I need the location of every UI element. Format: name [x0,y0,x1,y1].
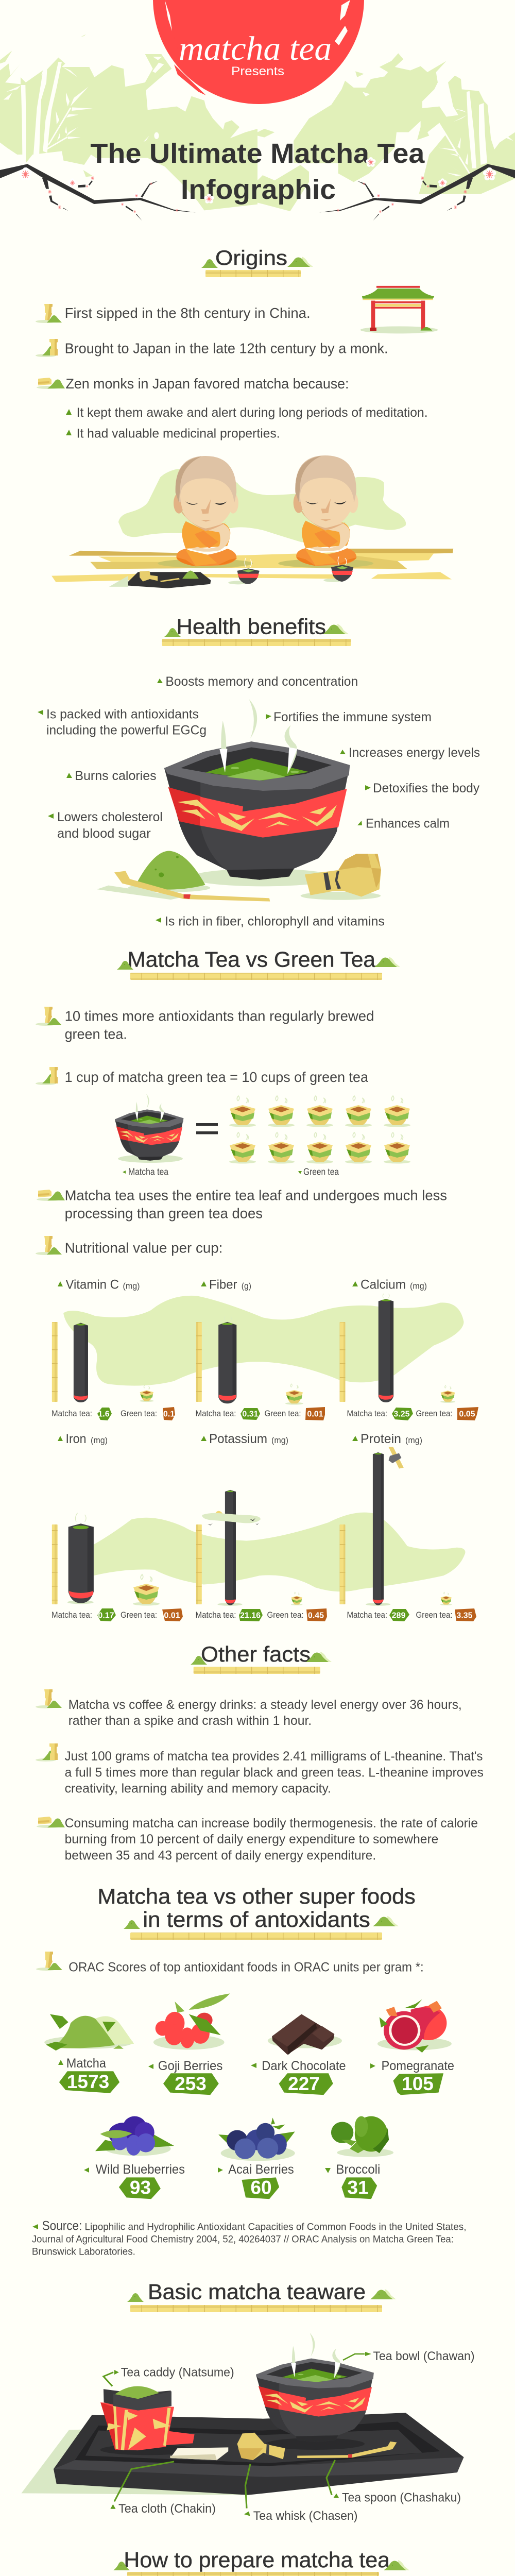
other fact 1 [36,1689,462,1728]
ORAC statement: ORAC Scores of top antioxidant foods in ORAC units per gram *: [68,1960,424,1974]
health benefits labels: Is rich in fiber, chlorophyll and vitamins [165,914,385,929]
equals sign [196,1123,218,1134]
green tea cups [133,1574,452,1605]
antioxidant foods: Pomegranate [381,2059,454,2073]
item 2: Brought to Japan in the late 12th century by a monk. [65,341,388,357]
heading: Other facts [191,1642,332,1674]
health benefits labels: Increases energy levels [349,745,480,760]
source note: Lipophilic and Hydrophilic Antioxidant Capacities of Common Foods in the United States, [84,2222,467,2233]
nutrient labels: (mg) [123,1281,140,1291]
antioxidant foods: 105 [402,2073,434,2094]
value badges [59,2071,443,2199]
antioxidant foods: 60 [250,2177,272,2198]
floor and tea things [52,549,453,588]
nutrient labels: Vitamin C [66,1278,119,1292]
nutrient labels [58,1278,140,1292]
values row 2: Matcha tea: [52,1610,92,1620]
tea cloth [170,2447,228,2460]
source note: Source: [42,2218,82,2233]
processing statement: processing than green tea does [65,1205,263,1221]
chart: nutrition row 1: Fiber [209,1278,237,1292]
antioxidant foods: 31 [347,2177,369,2198]
fiber bars [218,1316,236,1403]
item 3: Zen monks in Japan favored matcha because: [66,376,349,392]
heading: Other facts: Other facts [201,1642,311,1666]
monk 1 [174,456,238,566]
heading: Origins [201,247,313,277]
monks [174,455,358,566]
vitamin c bars [74,1317,88,1402]
nutrient labels: Iron [66,1432,87,1446]
other fact 3: burning from 10 percent of daily energy expenditure to somewhere [65,1832,438,1846]
tea tray [109,570,211,588]
label: green tea: Green tea [303,1167,339,1177]
title: The Ultimate Matcha Tea [90,138,425,169]
icon: goji berries [153,1993,230,2049]
illustration: matcha bowl with whisk, spoon and powder [97,851,381,902]
antioxidant statement: 10 times more antioxidants than regularly brewed [65,1008,374,1024]
nutrient labels: (mg) [91,1435,108,1445]
icon: clouds, sun and birds [202,1511,261,1526]
other fact 3: between 35 and 43 percent of daily energy expenditure. [65,1848,376,1862]
other fact 2: Just 100 grams of matcha tea provides 2.41 milligrams of L-theanine. That's [65,1749,483,1764]
heading: Matcha tea vs other super foods: in terms of antoxidants [143,1907,370,1931]
values row 1: 0.31 [242,1410,259,1419]
teaware labels: Tea spoon (Chashaku) [342,2490,461,2504]
values row 1: Green tea: [265,1409,301,1418]
values row 1: Matcha tea: [52,1409,92,1418]
icon: matcha powder [44,2014,134,2050]
heading: Health benefits: Health benefits [176,615,326,639]
illustration: 1 matcha cup equals 10 green tea cups [115,1094,410,1177]
protein bars [366,1452,390,1606]
tray [21,2413,464,2495]
food labels and values: 1573 [67,2071,109,2092]
teaware labels: Tea bowl (Chawan) [373,2349,475,2363]
icon: satellite [389,1447,404,1469]
health benefits labels: Is packed with antioxidants [46,707,199,721]
values row 2: Matcha tea: [347,1610,387,1620]
values row 1: Matcha tea: [347,1409,387,1418]
branches with blossoms [0,164,515,221]
values row 1: Matcha tea: [196,1409,236,1418]
health benefits labels: Lowers cholesterol [57,810,163,824]
food labels and values [58,2056,109,2092]
antioxidant foods: Dark Chocolate [262,2059,346,2073]
values row 1 [52,1407,478,1420]
tea caddy [100,2386,195,2450]
cup 1 [228,558,260,584]
nutrient labels [58,1432,108,1446]
other fact 1: Matcha vs coffee & energy drinks: a steady level energy over 36 hours, [68,1698,462,1712]
health benefits labels: Burns calories [75,769,157,783]
sub item 2: It had valuable medicinal properties. [77,427,280,441]
ORAC statement [36,1952,424,1974]
chart: nutrition row 2: Potassium [209,1432,267,1446]
food labels and values: Matcha [66,2056,106,2071]
tea bowl with pointer [256,2333,374,2442]
heading: Health benefits [162,615,351,646]
item 1: First sipped in the 8th century in China. [65,305,311,321]
health benefits labels: Enhances calm [366,817,450,831]
presents: Presents [231,64,284,78]
label: matcha tea: Matcha tea [128,1167,169,1177]
values row 2: Green tea: [121,1610,157,1620]
values row 2 [52,1608,476,1621]
green tea cups [140,1384,455,1405]
other fact 2 [36,1743,484,1796]
values row 2: 0.45 [308,1612,324,1620]
antioxidant foods: 253 [175,2073,207,2094]
title: Infographic [181,174,336,205]
icon: acai berries [218,2117,295,2161]
icon: broccoli [331,2116,393,2157]
values row 2: Green tea: [416,1610,452,1620]
heading: How to prepare matcha tea: How to prepare matcha tea [124,2548,390,2572]
health benefits labels: Fortifies the immune system [273,710,432,724]
other fact 3 [37,1816,478,1862]
values row 2: 289 [392,1612,405,1620]
green backdrop [118,469,406,543]
sub item 1: It kept them awake and alert during long periods of meditation. [77,405,428,420]
chart: nutrition row 2: (mg) [271,1435,288,1445]
antioxidant foods: 227 [288,2073,320,2094]
chart: nutrition row 2: (mg) [405,1435,422,1445]
icon: chinese gate [360,286,438,333]
values row 1: 0.05 [459,1410,475,1419]
origins list [36,304,428,441]
illustration: teaware on tray [21,2333,474,2523]
values row 1: Green tea: [416,1409,452,1418]
illustration: two monks on wooden floor [52,455,453,588]
heading: Matcha tea vs other super foods [97,1884,416,1940]
source note: Brunswick Laboratories. [32,2247,135,2258]
pointer lines [104,2372,335,2509]
chart: nutrition row 1: Calcium [360,1278,406,1292]
heading: Origins: Origins [215,247,287,269]
values row 2: 3.35 [456,1612,473,1620]
heading: Matcha Tea vs Green Tea [117,947,400,980]
health benefits labels: including the powerful EGCg [46,723,207,737]
processing statement: Matcha tea uses the entire tea leaf and undergoes much less [65,1187,447,1203]
values row 2: 21.16 [240,1612,261,1620]
cup 2 [323,556,353,582]
chart: nutrition row 1: (g) [242,1281,251,1291]
antioxidant foods: Goji Berries [158,2059,222,2073]
values row 2: Matcha tea: [196,1610,236,1620]
calcium bars [379,1294,393,1402]
source note [32,2218,466,2258]
heading: Matcha Tea vs Green Tea: Matcha Tea vs Green Tea [128,947,376,972]
nutritional heading: Nutritional value per cup: [65,1240,222,1256]
tea spoon [297,2442,397,2458]
values row 1: 0.1 [163,1410,175,1419]
antioxidant foods: Acai Berries [228,2162,294,2177]
values row 1: 1.6 [98,1410,110,1419]
health benefits labels: Detoxifies the body [373,781,479,795]
source note: Journal of Agricultural Food Chemistry 2004, 52, 40264037 // ORAC Analysis on Matcha Green Tea: [32,2234,454,2245]
potassium bars [217,1490,243,1606]
heading: Basic matcha teaware [127,2279,396,2312]
values row 1: Green tea: [121,1409,157,1418]
tea whisk [237,2433,285,2460]
logo: matcha tea: matcha tea [179,30,332,67]
iron bars [67,1513,94,1604]
antioxidant foods: Broccoli [336,2162,380,2177]
values row 2: Green tea: [267,1610,304,1620]
values row 1: 0.01 [307,1410,323,1419]
matcha bowl [115,1094,183,1163]
antioxidant foods: Wild Blueberries [96,2162,185,2177]
icon: dark chocolate [268,2014,342,2055]
health benefits labels: Boosts memory and concentration [165,674,358,689]
processing statement [37,1187,447,1221]
nutritional heading [36,1236,222,1256]
other fact 2: creativity, learning ability and memory capacity. [65,1782,331,1796]
icon: bamboo whisk [305,854,381,896]
antioxidant foods: 93 [130,2177,151,2198]
chart: nutrition row 2: Protein [360,1432,401,1446]
header background: green mountains with bamboo [0,35,515,211]
values row 1: 3.25 [393,1410,410,1419]
other fact 3: Consuming matcha can increase bodily thermogenesis. the rate of calorie [65,1816,478,1831]
heading: Matcha tea vs other super foods: Matcha tea vs other super foods [97,1884,416,1908]
tea cups [228,556,353,584]
antioxidant foods [44,1993,454,2199]
values row 2: 0.17 [98,1612,114,1620]
title [90,138,425,205]
values row 2: 0.01 [164,1612,180,1620]
chart: nutrition row 1: (mg) [410,1281,427,1291]
cup equivalence statement: 1 cup of matcha green tea = 10 cups of green tea [65,1069,368,1085]
antioxidant statement: green tea. [65,1026,127,1042]
heading: Basic matcha teaware: Basic matcha teaware [148,2279,366,2303]
antioxidant statement [36,1007,374,1042]
other fact 1: rather than a spike and crash within 1 hour. [68,1714,312,1728]
other fact 2: a full 5 times more than regular black and green teas. L-theanine improves [65,1766,484,1780]
health benefits labels: and blood sugar [57,826,151,841]
rulers [52,1322,346,1402]
monk 2 [294,455,358,566]
rulers [52,1524,346,1604]
chart: nutrition row 2 [52,1432,476,1621]
health benefits labels [38,674,480,929]
teaware labels: Tea whisk (Chasen) [253,2509,357,2523]
red sun [153,0,364,104]
teaware labels [118,2349,475,2523]
chart: nutrition row 1 [52,1278,478,1420]
icon: pomegranate [377,1999,452,2053]
teaware labels: Tea caddy (Natsume) [121,2366,234,2380]
teaware labels: Tea cloth (Chakin) [118,2502,216,2516]
icon: wild blueberries [95,2116,174,2156]
ten green tea cups [229,1096,410,1163]
